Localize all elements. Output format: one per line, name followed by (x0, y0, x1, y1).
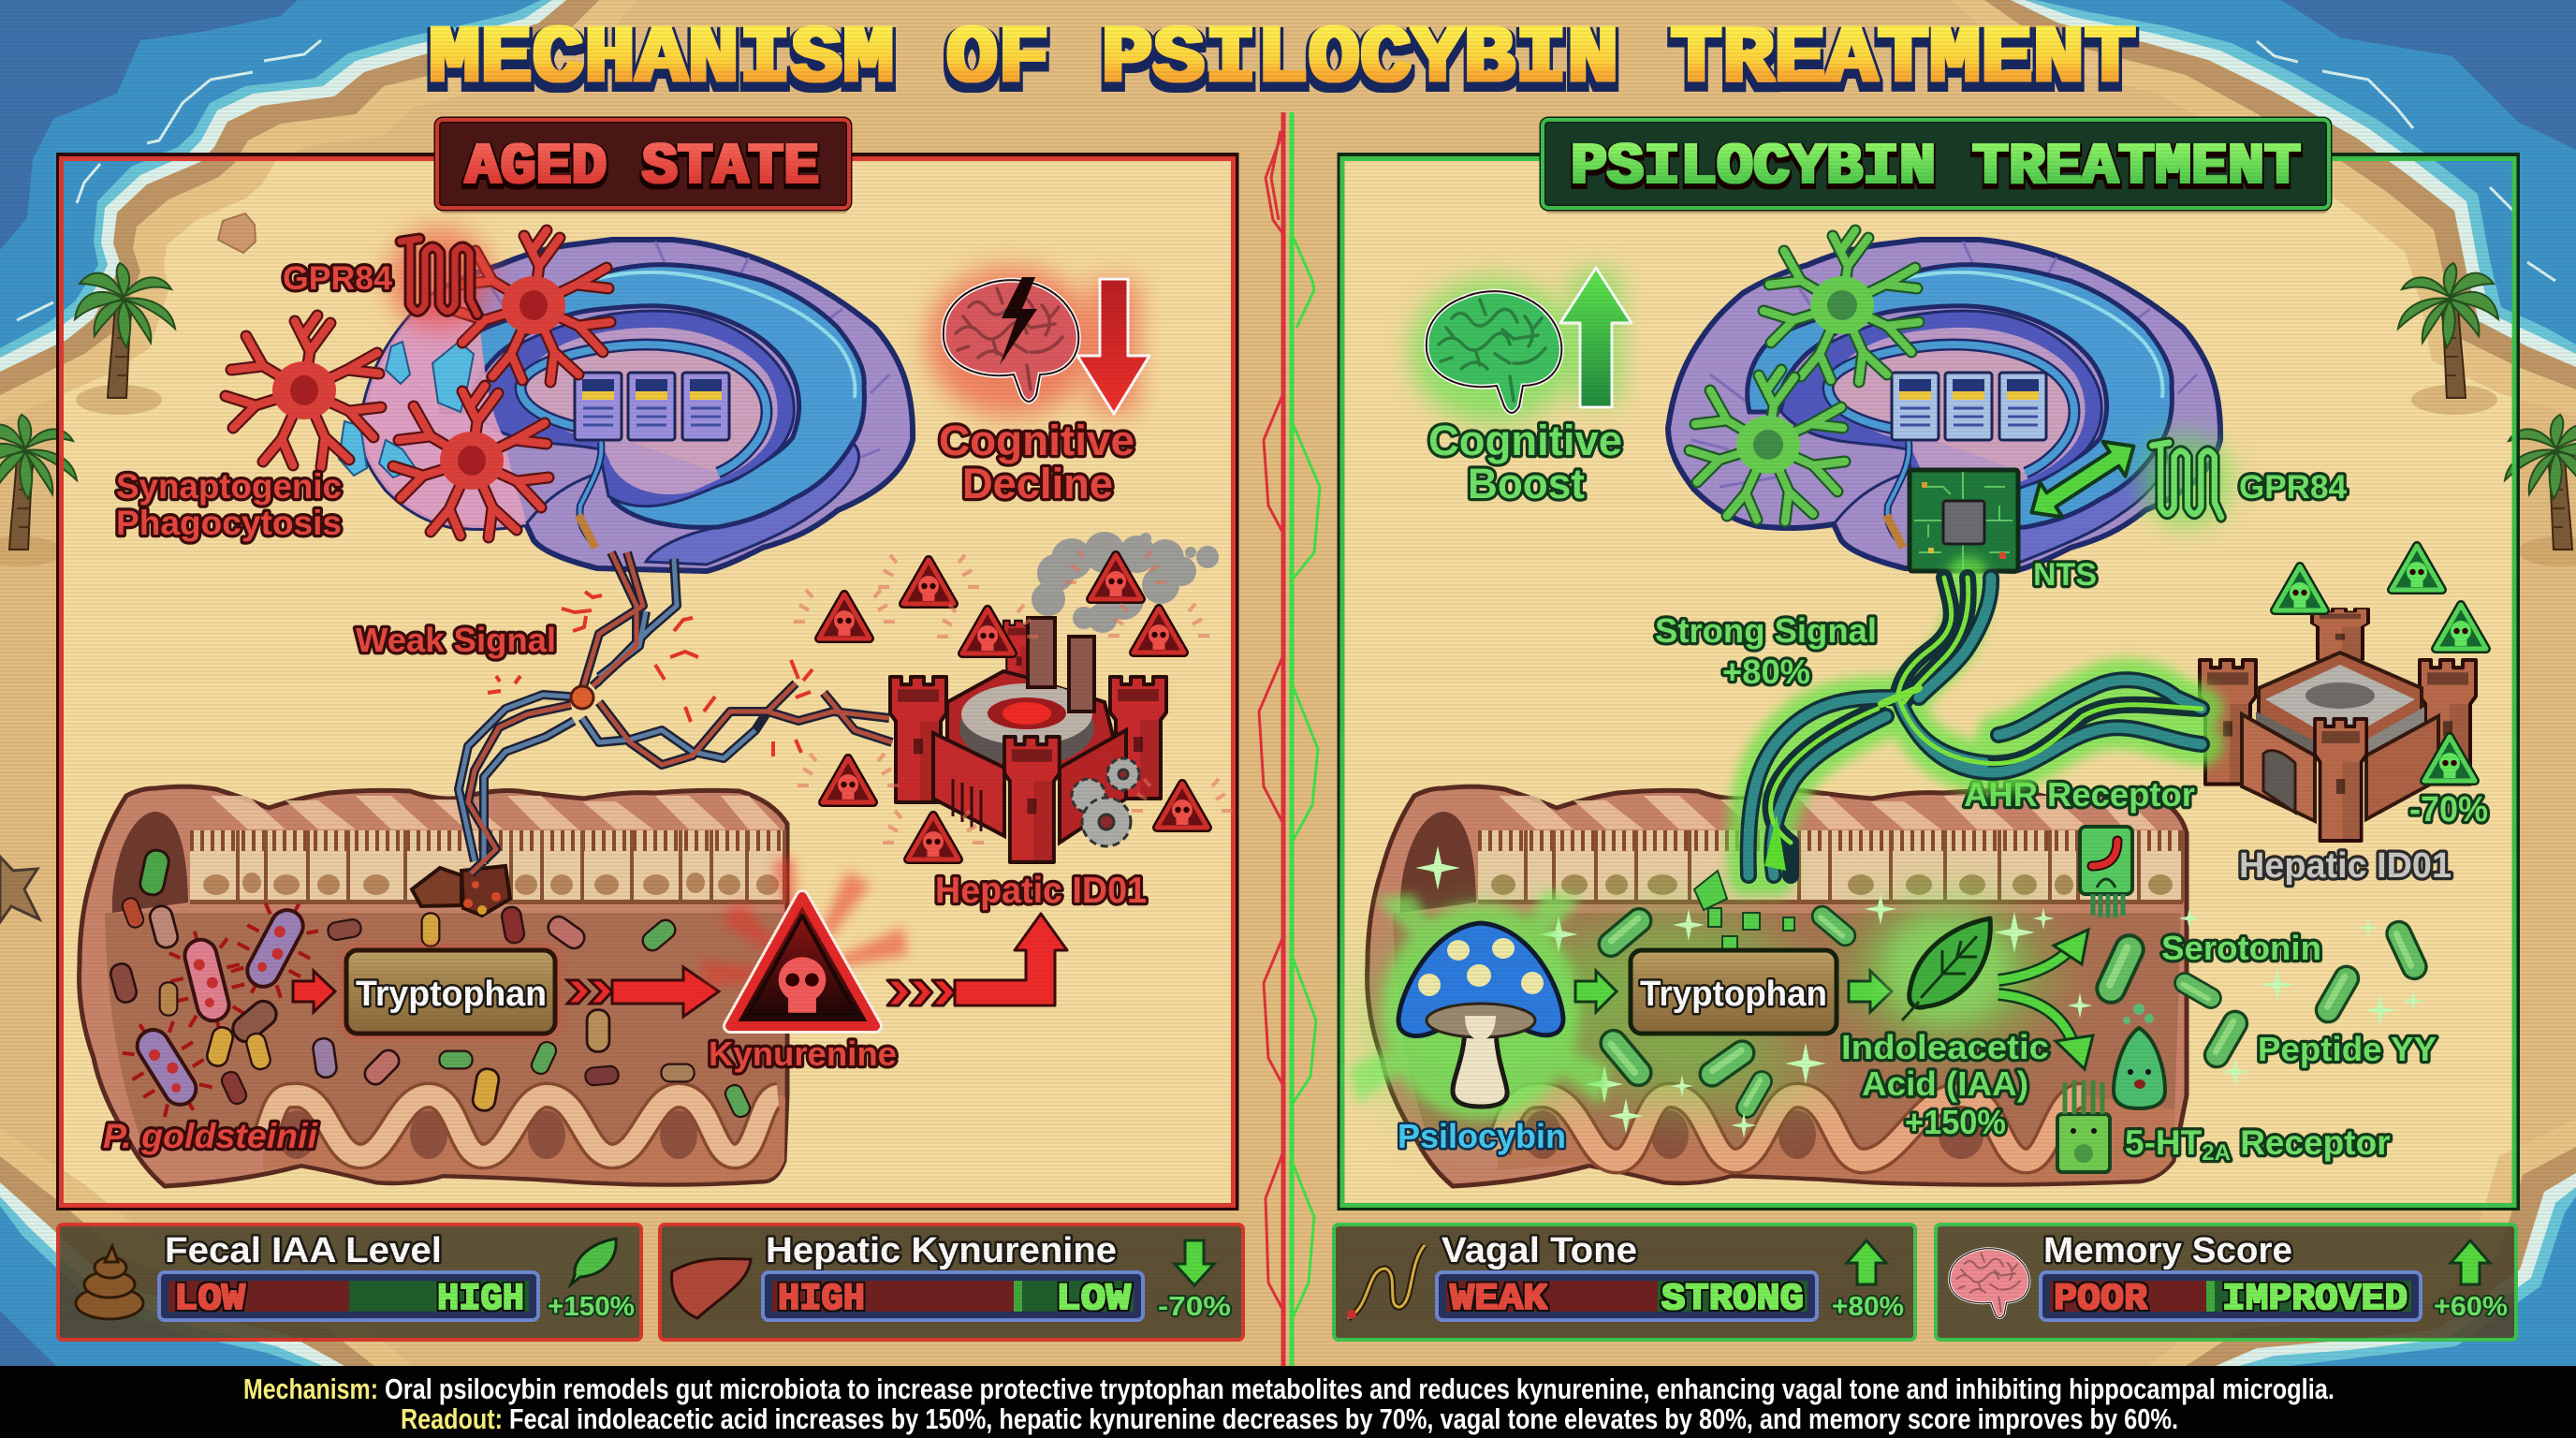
icon: NTS chip (1910, 470, 2018, 571)
green glow in lumen (1368, 899, 2050, 1123)
label: GPR84 with coil: GPR84 (2239, 469, 2348, 506)
gut cross section: treated (1348, 775, 2437, 1186)
arrow: tryptophan to kynurenine (567, 967, 719, 1017)
label: 5-HT2A receptor: 5-HT (2125, 1123, 2202, 1162)
brain: hippocampus treated (1668, 230, 2220, 571)
brain: hippocampus aged (226, 230, 913, 571)
label: indoleacetic acid: Indoleacetic (1841, 1028, 2049, 1066)
center divider: red and green signal lines (1259, 112, 1320, 1366)
ocean: bottom right corner (2148, 1119, 2576, 1366)
icon: healthy brain and up arrow (1411, 268, 1632, 424)
value: +150% (548, 1292, 635, 1322)
metric card: memory score (1936, 1225, 2516, 1340)
label: psilocybin: Psilocybin (1398, 1117, 1566, 1155)
metric card: hepatic kynurenine (660, 1225, 1243, 1340)
icon: stool (76, 1246, 143, 1319)
heading tag: psilocybin treatment: PSILOCYBIN TREATMENT (1571, 134, 2301, 200)
label: strong signal +80%: Strong Signal (1655, 611, 1877, 650)
footer: mechanism and readout text: Mechanism: (243, 1372, 378, 1405)
title: Fecal IAA Level (165, 1231, 442, 1270)
castle: hepatic IDO1 factory (890, 532, 1219, 862)
green nerve ending debris (1694, 871, 1794, 949)
main title: MECHANISM OF PSILOCYBIN TREATMENT (429, 13, 2136, 105)
icon: leaf (571, 1239, 616, 1284)
label: cognitive decline: Decline (962, 460, 1113, 507)
icon: IAA leaf (1881, 913, 2012, 1025)
gut cross section: aged (80, 786, 787, 1186)
title: Memory Score (2043, 1231, 2292, 1270)
label: cognitive boost (1428, 417, 1622, 507)
title: Hepatic Kynurenine (766, 1231, 1117, 1270)
label: -70%: -70% (2409, 790, 2488, 829)
label: peptide YY: Peptide YY (2258, 1030, 2437, 1068)
microglia: three activated neurons (226, 230, 610, 537)
label: 5-HT2A receptor: Receptor (2231, 1123, 2391, 1162)
box: tryptophan aged: Tryptophan (356, 975, 547, 1014)
label: indoleacetic acid (1841, 1028, 2049, 1141)
gauge bar: LOW (1056, 1279, 1131, 1321)
gauge bar: HIGH (437, 1279, 524, 1321)
footer: mechanism and readout text (0, 1366, 2576, 1438)
panel fills: light sand inside panels (57, 154, 2517, 1209)
title: Vagal Tone (1442, 1231, 1637, 1270)
icon: up arrow (1847, 1240, 1886, 1284)
icon: down arrow (1175, 1240, 1214, 1285)
label: hepatic IDO1 treated: Hepatic ID01 (2239, 846, 2452, 886)
icon: vagus nerve squiggle (1347, 1245, 1425, 1319)
box: tryptophan treated: Tryptophan (1640, 975, 1827, 1014)
gauge bar: LOW (174, 1279, 245, 1321)
memory cards (575, 373, 729, 440)
icon: serotonin droplet (2114, 1004, 2165, 1108)
icon: up arrow (2451, 1240, 2490, 1284)
gauge bar: STRONG (1661, 1279, 1804, 1321)
synapse fragments (339, 342, 474, 477)
label: strong signal +80% (1655, 611, 1877, 691)
arrow: psilocybin to tryptophan (1575, 971, 1617, 1012)
arrow: tryptophan to IAA (1849, 971, 1892, 1012)
icon: pink brain (1950, 1249, 2029, 1318)
icon: kynurenine warning triangle (700, 857, 908, 1026)
warning triangles: aged liver (794, 550, 1233, 859)
label: hepatic IDO1 aged: Hepatic ID01 (935, 871, 1147, 911)
label: GPR84 with coil (283, 227, 491, 330)
castle: hepatic IDO1 calmed (2200, 609, 2476, 841)
smoke (1032, 532, 1219, 633)
label: cognitive decline: Cognitive (939, 417, 1134, 464)
footer: mechanism and readout text: Readout: (401, 1402, 503, 1435)
footer: mechanism and readout text: Fecal indoleacetic acid increases by 150%, hepatic kynurenine decreases by 70%, vagal tone elevates by 80%, and memory score improves by 60%. (509, 1402, 2178, 1435)
label: cognitive decline (939, 417, 1134, 507)
label: NTS: NTS (2033, 557, 2097, 593)
metric card: fecal IAA level (58, 1225, 641, 1340)
heading tag: aged state (437, 120, 849, 213)
gauge bar (159, 1272, 538, 1321)
icon: damaged brain and down arrow (927, 267, 1149, 417)
label: GPR84 with coil (2142, 433, 2348, 527)
arrow: IAA to AHR receptor (1998, 930, 2088, 980)
value: +60% (2434, 1292, 2508, 1322)
palm trees (0, 263, 2576, 566)
vagus nerve: strong signal (1749, 578, 2202, 875)
label: synaptogenic phagocytosis (116, 467, 342, 542)
dysbiotic bacteria (109, 848, 753, 1129)
label: cognitive boost: Cognitive (1428, 417, 1622, 464)
starfish (0, 857, 39, 922)
arrow: IAA to 5-HT2A receptor (1998, 994, 2093, 1069)
label: 5-HT2A receptor: 2A (2202, 1140, 2231, 1166)
gauge bar: POOR (2054, 1279, 2147, 1321)
damaged barrier at nerve ending (412, 866, 510, 916)
arrow: microbes to tryptophan (293, 971, 335, 1012)
arrow: NTS to GPR84 double headed (2021, 429, 2144, 530)
label: weak signal: Weak Signal (356, 621, 556, 659)
ocean: top left corner (0, 0, 637, 421)
label: strong signal +80%: +80% (1722, 653, 1810, 691)
gauge bar (2041, 1272, 2421, 1321)
label: kynurenine: Kynurenine (709, 1034, 897, 1073)
box: tryptophan treated (1631, 950, 1837, 1034)
microglia: calmed neurons (1690, 230, 1919, 521)
arrow: kynurenine to hepatic IDO1 (887, 914, 1067, 1005)
ocean: bottom left corner (0, 1128, 412, 1366)
gears (1072, 758, 1139, 846)
icon: liver (671, 1258, 751, 1318)
label: cognitive boost: Boost (1468, 460, 1585, 507)
gauge bar (763, 1272, 1143, 1321)
sparkles (1415, 845, 2424, 1138)
ocean: top right corner (1952, 0, 2576, 417)
gauge bar: IMPROVED (2222, 1279, 2408, 1321)
label: indoleacetic acid: Acid (IAA) (1862, 1064, 2028, 1103)
warning triangles: calmed liver (2275, 546, 2486, 781)
gauge bar: WEAK (1450, 1279, 1547, 1321)
gauge bar: HIGH (778, 1279, 865, 1321)
rock (218, 213, 256, 253)
icon: psilocybin mushroom (1348, 889, 1610, 1119)
label: P. goldsteinii: P. goldsteinii (103, 1117, 318, 1155)
label: GPR84 with coil: GPR84 (283, 260, 393, 297)
heading tag: psilocybin treatment (1543, 120, 2329, 213)
label: AHR receptor: AHR Receptor (1964, 775, 2195, 814)
label: indoleacetic acid: +150% (1905, 1103, 2006, 1141)
box: tryptophan aged (344, 948, 557, 1035)
memory cards (1892, 373, 2046, 440)
icon: 5-HT2A receptor cell (2057, 1080, 2110, 1172)
metric card: vagal tone (1334, 1225, 1915, 1340)
signal sparks (488, 592, 812, 756)
value: -70% (1158, 1292, 1231, 1322)
label: synaptogenic phagocytosis: Synaptogenic (116, 467, 342, 506)
gauge bar (1437, 1272, 1817, 1321)
label: synaptogenic phagocytosis: Phagocytosis (116, 504, 342, 542)
value: +80% (1832, 1292, 1904, 1322)
icon: AHR receptor cell (2080, 827, 2132, 917)
heading tag: aged state: AGED STATE (465, 134, 819, 200)
vagus nerve: frayed weak signal (459, 552, 892, 873)
label: serotonin: Serotonin (2161, 929, 2321, 967)
probiotic bacteria (1594, 902, 2430, 1121)
